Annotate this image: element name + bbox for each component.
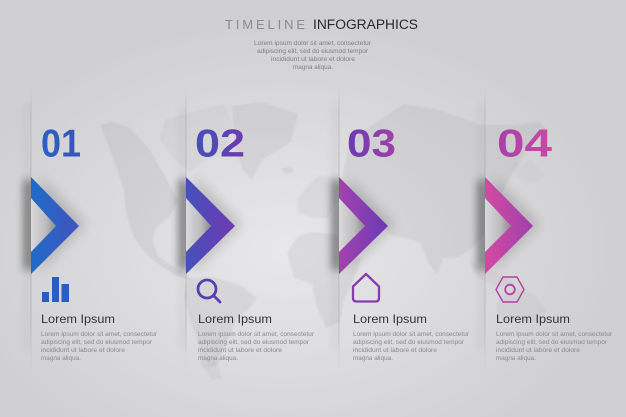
number 04: 04 [497,122,552,166]
description: magna aliqua. [41,356,81,362]
description: incididunt ut labore et dolore [353,348,438,354]
subtitle text block [254,41,371,71]
chevron arrow 04 [478,177,540,274]
panel: step 03 [332,122,469,362]
description [41,332,157,362]
title: TIMELINE [225,17,305,32]
title: INFOGRAPHICS [313,17,418,32]
subtitle text block: adipiscing elit, sed do eiusmod tempor [257,49,368,55]
heading: Lorem Ipsum [496,312,570,326]
icon: hex nut [496,277,524,302]
world map [100,102,548,380]
number 02: 02 [195,122,245,166]
description: adipiscing elit, sed do eiusmod tempor [198,340,309,346]
subtitle text block: magna aliqua. [293,65,333,71]
description: magna aliqua. [496,356,536,362]
description: Lorem ipsum dolor sit amet, consectetur [41,332,157,338]
description: incididunt ut labore et dolore [198,348,283,354]
subtitle text block: Lorem ipsum dolor sit amet, consectetur [254,41,371,47]
panel divider lines [25,85,485,370]
description [496,332,612,362]
description: Lorem ipsum dolor sit amet, consectetur [198,332,314,338]
description [198,332,314,362]
description: adipiscing elit, sed do eiusmod tempor [496,340,607,346]
description: Lorem ipsum dolor sit amet, consectetur [353,332,469,338]
description: magna aliqua. [353,356,393,362]
description: adipiscing elit, sed do eiusmod tempor [353,340,464,346]
icon: bar chart [42,277,69,302]
description: incididunt ut labore et dolore [41,348,126,354]
number 03: 03 [347,122,396,166]
icon: house [353,274,379,302]
heading: Lorem Ipsum [198,312,272,326]
subtitle text block: incididunt ut labore et dolore [271,57,356,63]
panel: step 01 [24,122,157,362]
infographic canvas [18,20,612,367]
description: Lorem ipsum dolor sit amet, consectetur [496,332,612,338]
heading: Lorem Ipsum [353,312,427,326]
panel: step 04 [478,122,612,362]
chevron arrow 01 [24,177,86,274]
description [353,332,469,362]
heading: Lorem Ipsum [41,312,115,326]
panel: step 02 [179,122,314,362]
chevron arrow 02 [179,177,242,274]
title [225,17,418,32]
number 01: 01 [41,122,81,166]
chevron arrow 03 [332,177,395,274]
description: magna aliqua. [198,356,238,362]
icon: magnifier [198,280,220,302]
description: adipiscing elit, sed do eiusmod tempor [41,340,152,346]
description: incididunt ut labore et dolore [496,348,581,354]
